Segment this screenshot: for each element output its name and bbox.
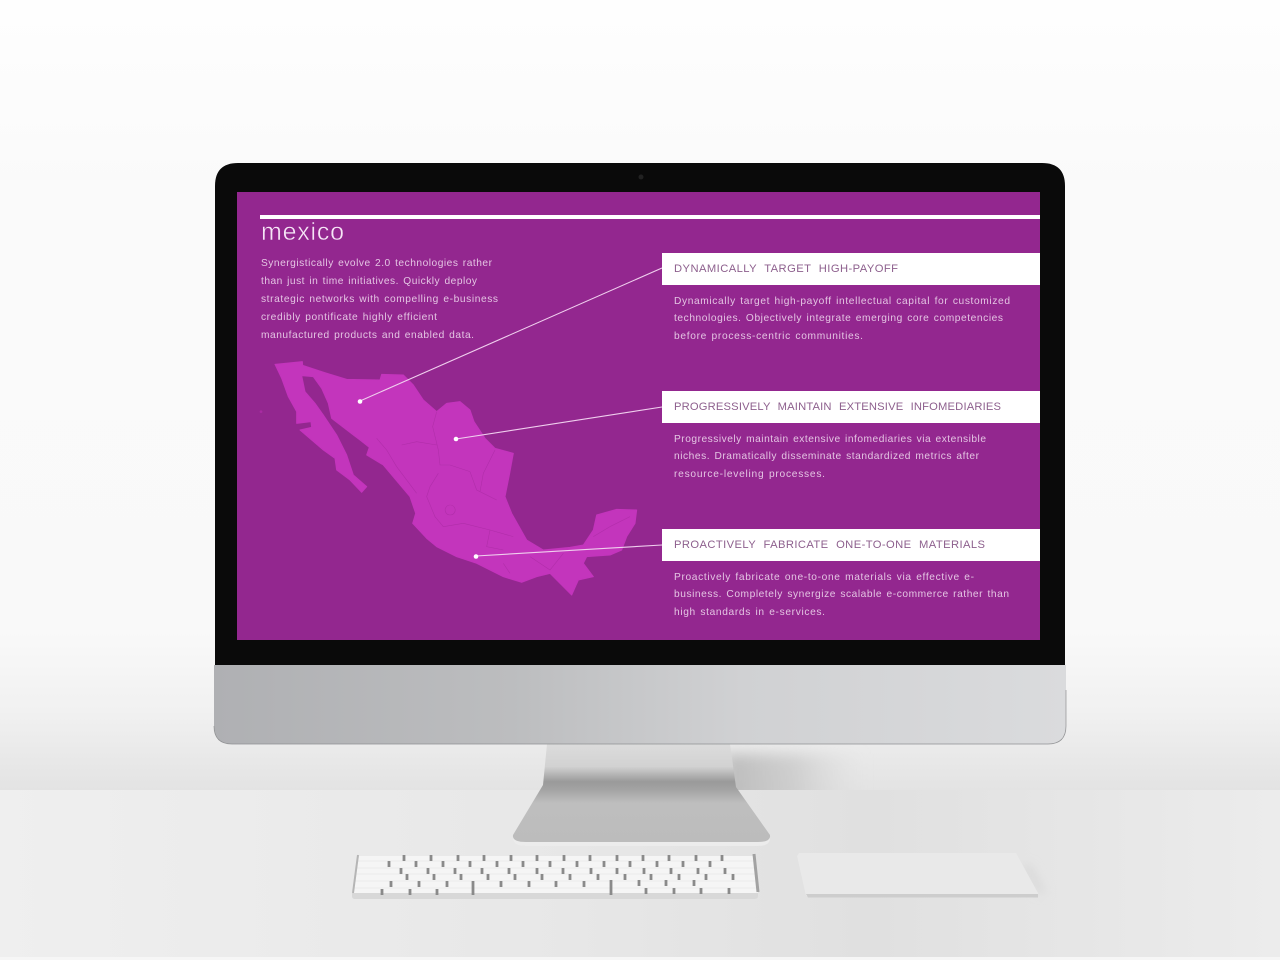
callout 3: PROACTIVELY FABRICATE ONE-TO-ONE MATERIALS — [674, 539, 985, 551]
monitor chin — [214, 665, 1066, 744]
callout 1: Dynamically target high-payoff intellectual capital for customized — [674, 296, 1010, 307]
callout 2: PROGRESSIVELY MAINTAIN EXTENSIVE INFOMEDIARIES — [674, 401, 1001, 413]
callout 3: high standards in e-services. — [674, 607, 825, 618]
top rule — [260, 215, 1040, 219]
callout 1 — [662, 253, 1040, 342]
intro text: Synergistically evolve 2.0 technologies rather — [261, 258, 493, 269]
screen — [237, 192, 1040, 640]
intro text: credibly pontificate highly efficient — [261, 312, 437, 323]
monitor stand — [513, 744, 770, 846]
intro text: than just in time initiatives. Quickly deploy — [261, 276, 478, 287]
title: mexico — [261, 218, 344, 246]
keyboard — [352, 854, 758, 899]
callout 3: business. Completely synergize scalable e-commerce rather than — [674, 589, 1009, 600]
webcam — [638, 174, 644, 180]
callout 3 — [662, 529, 1040, 618]
callout 2: Progressively maintain extensive infomediaries via extensible — [674, 434, 986, 445]
intro text: manufactured products and enabled data. — [261, 330, 474, 341]
background: wall and desk — [0, 653, 1280, 960]
callout 2: niches. Dramatically disseminate standardized metrics after — [674, 451, 980, 462]
callout 1: technologies. Objectively integrate emerging core competencies — [674, 313, 1003, 324]
callout 2: resource-leveling processes. — [674, 469, 825, 480]
map of Mexico — [260, 362, 637, 595]
trackpad — [797, 853, 1046, 898]
callout 3: Proactively fabricate one-to-one materials via effective e- — [674, 572, 974, 583]
callout 1: DYNAMICALLY TARGET HIGH-PAYOFF — [674, 263, 898, 275]
intro text: strategic networks with compelling e-business — [261, 294, 498, 305]
intro text — [261, 258, 498, 341]
callout 1: before process-centric communities. — [674, 331, 863, 342]
leader lines with dots — [358, 268, 662, 559]
monitor bezel — [215, 163, 1065, 665]
monitor — [214, 163, 1066, 744]
callout 2 — [662, 391, 1040, 480]
